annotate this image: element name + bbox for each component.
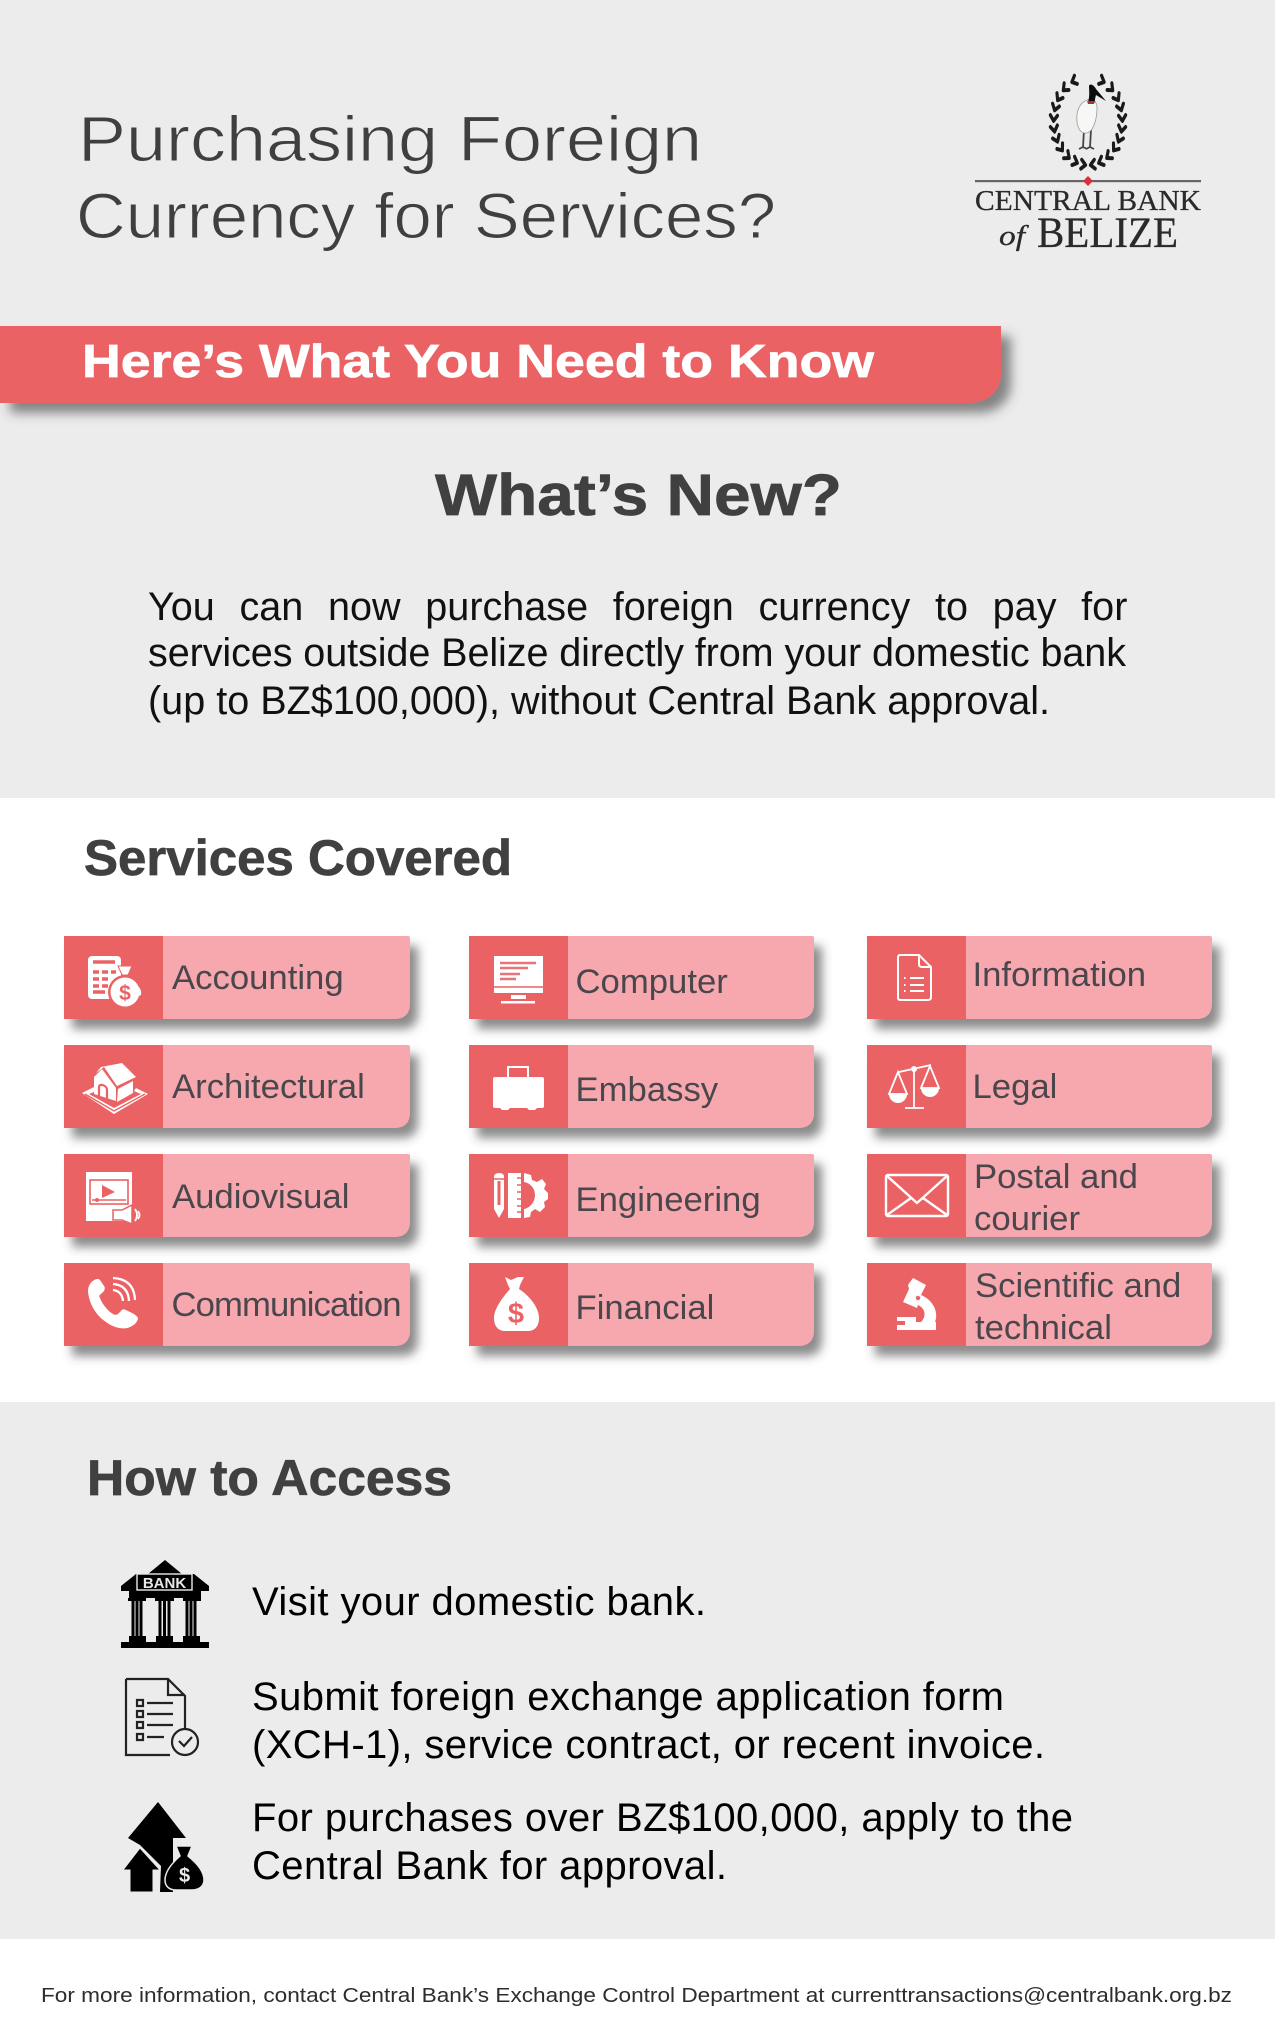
icon: laurel wreath [1050, 76, 1126, 169]
icon: phone [88, 1278, 138, 1328]
card: Information [867, 936, 1212, 1019]
heading: services covered: Services Covered [84, 830, 512, 886]
logo wordmark: BELIZE [1037, 210, 1178, 257]
step: submit form: Submit foreign exchange application form [252, 1675, 1004, 1719]
title: Currency for Services? [76, 180, 776, 252]
card: Architectural [64, 1045, 410, 1128]
card: Postal and courier: courier [974, 1200, 1080, 1238]
footer: For more information, contact Central Bank’s Exchange Control Department at currenttransactions@centralbank.org.bz [41, 1984, 1232, 2007]
card: Communication [64, 1263, 410, 1346]
text block: intro: (up to BZ$100,000), without Central Bank approval. [148, 679, 1050, 723]
icon: briefcase [493, 1067, 544, 1110]
card: Scientific and technical: Scientific and [975, 1267, 1181, 1305]
card: Embassy: Embassy [576, 1071, 719, 1109]
card: Legal: Legal [972, 1068, 1057, 1106]
title [76, 103, 776, 252]
logo wordmark [975, 185, 1201, 257]
panel: how to access background [0, 1402, 1275, 1939]
icon: money bag: $ [508, 1298, 524, 1330]
card: Audiovisual: Audiovisual [172, 1178, 349, 1216]
icon: video and speaker [86, 1172, 140, 1224]
card: Financial: Financial [576, 1289, 714, 1327]
card: Postal and courier [867, 1154, 1212, 1238]
text block: intro: You can now purchase foreign currency to pay for [148, 585, 1127, 629]
icon: pencil ruler gear [494, 1173, 548, 1218]
step: over limit: For purchases over BZ$100,000, apply to the [252, 1796, 1073, 1840]
card: Computer [469, 936, 814, 1019]
icon: bank: BANK [143, 1575, 186, 1592]
card: Legal [867, 1045, 1212, 1128]
step: submit form [252, 1675, 1045, 1767]
card: Scientific and technical [867, 1263, 1212, 1347]
banner heading: Here’s What You Need to Know [82, 335, 874, 387]
card: Financial [469, 1263, 814, 1346]
icon: calculator and money bag: $ [119, 982, 131, 1005]
card: Engineering: Engineering [576, 1181, 761, 1219]
icon: calculator and money bag [88, 956, 142, 1009]
step: over limit [252, 1796, 1073, 1888]
icon: jabiru stork [1077, 85, 1106, 149]
card: Accounting: Accounting [172, 959, 344, 997]
heading: how to access: How to Access [87, 1450, 452, 1506]
icon: document [898, 955, 931, 1000]
logo: Central Bank of Belize [975, 76, 1201, 257]
card: Postal and courier: Postal and [974, 1158, 1138, 1196]
card: Information: Information [972, 956, 1146, 994]
step: over limit: Central Bank for approval. [252, 1844, 727, 1888]
icon: money bag [494, 1277, 539, 1331]
card: Accounting [64, 936, 410, 1019]
logo wordmark: CENTRAL BANK [975, 185, 1201, 217]
title: Purchasing Foreign [78, 103, 702, 175]
step: visit bank: Visit your domestic bank. [252, 1580, 706, 1624]
text block: intro: services outside Belize directly from your domestic bank [148, 631, 1126, 675]
text block: intro [148, 585, 1127, 723]
heading: What's New: What’s New? [435, 463, 842, 528]
icon: house on plan [82, 1063, 148, 1114]
card: Embassy [469, 1045, 814, 1128]
icon: arrows and money bag [123, 1802, 204, 1892]
icon: microscope [897, 1278, 936, 1330]
icon: bank [121, 1560, 209, 1648]
logo divider [975, 176, 1201, 186]
icon: arrows and money bag: $ [179, 1865, 190, 1887]
card: Engineering [469, 1154, 814, 1237]
icon: form checklist [126, 1679, 198, 1755]
panel: top section background [0, 0, 1275, 798]
card: Computer: Computer [576, 963, 728, 1001]
card: Scientific and technical: technical [975, 1309, 1112, 1347]
icon: envelope [886, 1175, 948, 1216]
card: Architectural: Architectural [172, 1068, 365, 1106]
icon: monitor [494, 956, 543, 1004]
card: Audiovisual [64, 1154, 410, 1237]
logo wordmark: of [999, 220, 1030, 252]
icon: scales [889, 1065, 939, 1108]
card: Communication: Communication [172, 1286, 402, 1324]
step: submit form: (XCH-1), service contract, or recent invoice. [252, 1723, 1045, 1767]
banner [0, 326, 1001, 403]
